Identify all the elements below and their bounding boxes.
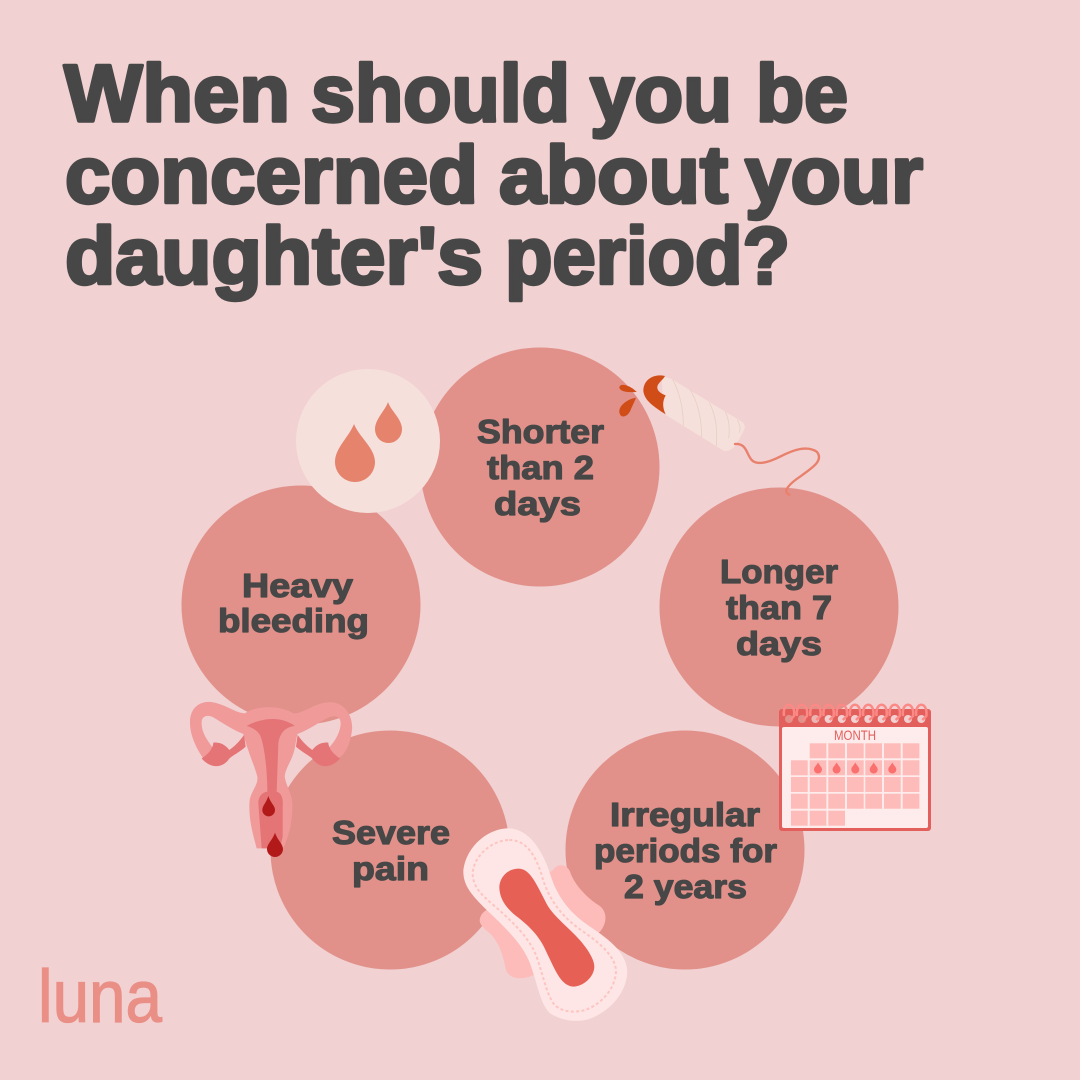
panel: severe pain — [270, 730, 510, 970]
panel: irregular periods for 2 years: periods for — [594, 832, 777, 869]
panel: severe pain: pain — [352, 850, 429, 887]
panel: shorter than 2 days: days — [494, 485, 581, 522]
panel: longer than 7 days: Longer — [720, 553, 838, 590]
calendar month label: MONTH — [834, 727, 876, 743]
panel: irregular periods for 2 years: 2 years — [624, 868, 747, 905]
calendar grid — [791, 743, 919, 826]
panel: longer than 7 days: days — [736, 625, 822, 662]
panel: heavy bleeding — [182, 486, 420, 724]
panel: heavy bleeding: Heavy — [242, 567, 354, 604]
title: your — [745, 130, 923, 220]
panel: longer than 7 days — [660, 488, 898, 726]
icon: blood drops — [296, 369, 440, 513]
logo: luna: luna — [38, 955, 163, 1038]
calendar drops — [814, 762, 896, 774]
title: be — [756, 49, 848, 139]
calendar rings — [784, 705, 926, 720]
icon: uterus — [190, 702, 352, 857]
title: daughter's — [65, 212, 483, 302]
title: should — [311, 49, 570, 139]
title: When — [64, 49, 290, 139]
panel: irregular periods for 2 years: Irregular — [610, 796, 760, 833]
panel: heavy bleeding: bleeding — [218, 602, 369, 639]
panel: shorter than 2 days — [420, 348, 660, 586]
panel: irregular periods for 2 years — [566, 730, 804, 970]
panel: severe pain: Severe — [332, 814, 450, 851]
panel: longer than 7 days: than 7 — [726, 589, 832, 626]
title: concerned — [65, 130, 478, 220]
title: about — [499, 130, 728, 220]
title: you — [590, 49, 732, 139]
panel: shorter than 2 days: Shorter — [477, 413, 604, 450]
panel: shorter than 2 days: than 2 — [487, 449, 594, 486]
title: period? — [505, 212, 790, 302]
title — [64, 49, 923, 302]
icon: sanitary pad — [463, 828, 627, 1021]
icon: calendar — [779, 705, 931, 831]
calendar holes — [785, 715, 925, 723]
icon: tampon — [619, 375, 819, 495]
